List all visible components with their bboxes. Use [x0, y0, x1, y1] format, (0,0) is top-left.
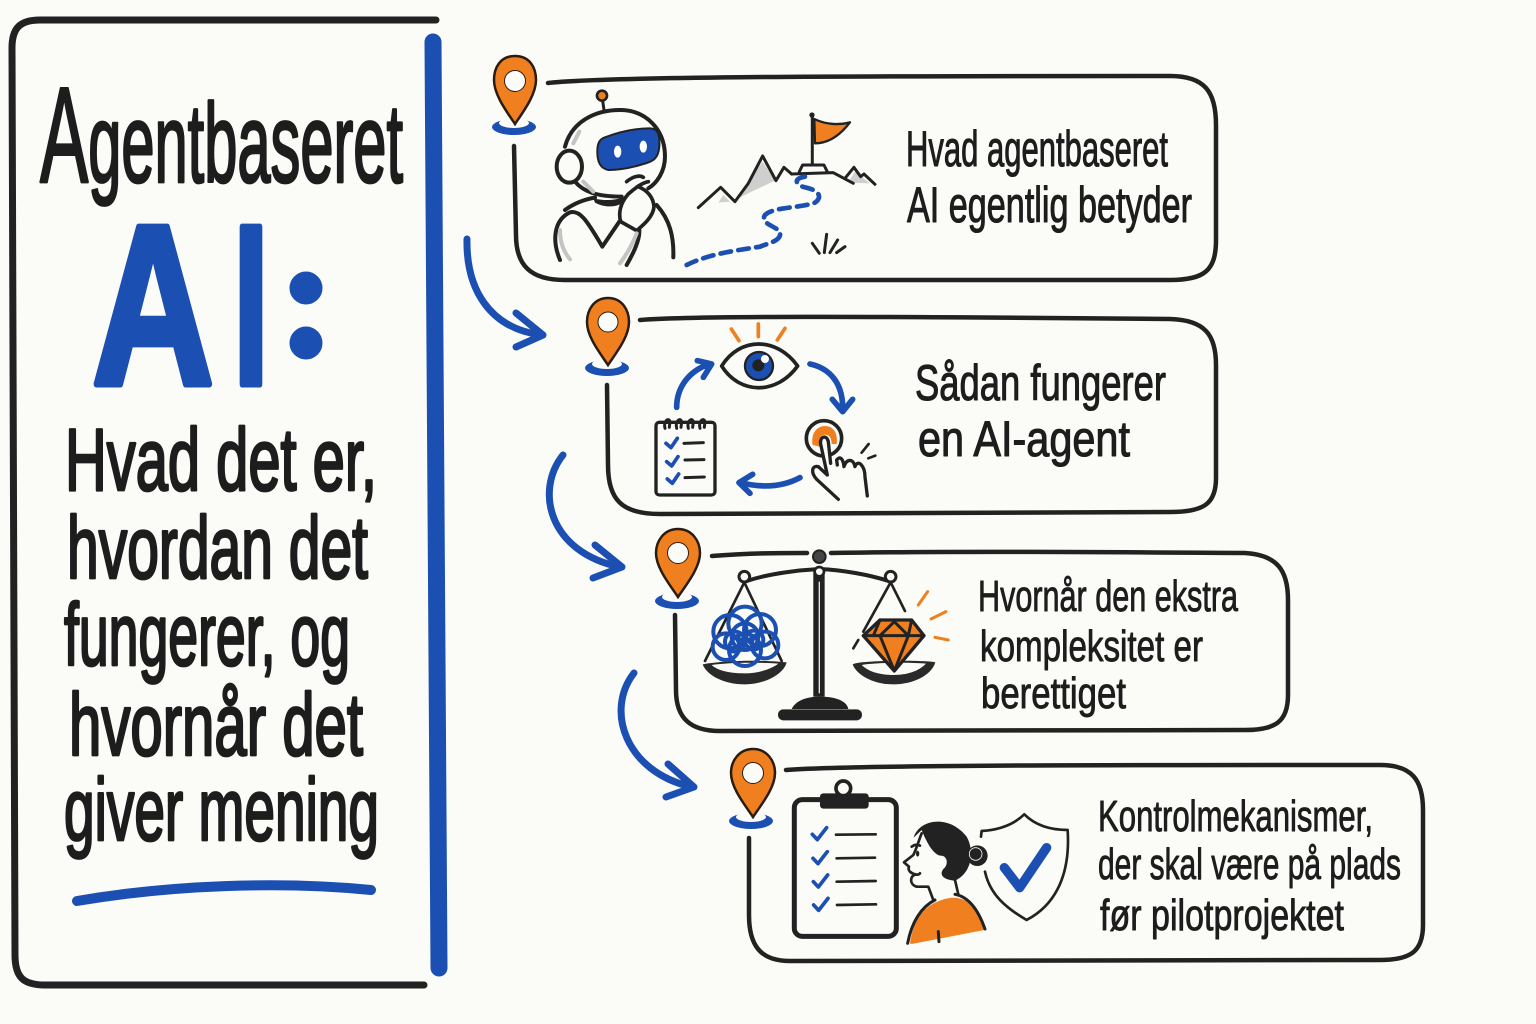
panel: step 3 [655, 529, 1288, 731]
subtitle text: Hvad det er, [65, 410, 377, 509]
icon: agent loop [656, 324, 875, 499]
subtitle text [64, 410, 379, 859]
text: step 4: før pilotprojektet [1100, 891, 1344, 940]
heading: AI: A [92, 179, 214, 433]
pin 1 [492, 56, 536, 135]
panel: step 4 [729, 749, 1423, 961]
text: step 1 [906, 121, 1192, 233]
arrow: step 3 to 4 [621, 673, 694, 797]
heading: Agentbaseret: Agentbaseret [40, 59, 403, 211]
arrow: step 2 to 3 [549, 455, 622, 578]
heading: AI: I [233, 179, 269, 433]
panel: step 1 [492, 56, 1216, 280]
subtitle text: hvordan det [67, 498, 368, 597]
title underline [77, 885, 371, 901]
text: step 4 [1098, 792, 1401, 940]
text: step 3: Hvornår den ekstra [978, 572, 1238, 621]
subtitle text: giver mening [64, 760, 379, 859]
text: step 3 [978, 572, 1238, 718]
text: step 1: AI egentlig betyder [907, 177, 1192, 233]
panel: step 2 [585, 298, 1216, 514]
text: step 2: Sådan fungerer [915, 355, 1166, 411]
panel: title frame [12, 20, 439, 985]
pin 4 [729, 749, 775, 829]
pin 3 [655, 529, 700, 609]
icon: thinking robot [555, 91, 875, 265]
subtitle text: fungerer, og [64, 585, 350, 684]
arrow: step 1 to 2 [467, 239, 543, 347]
text: step 3: berettiget [981, 669, 1126, 718]
subtitle text: hvornår det [69, 675, 363, 774]
text: step 3: kompleksitet er [980, 622, 1203, 671]
pin 2 [585, 298, 629, 376]
text: step 4: Kontrolmekanismer, [1098, 792, 1373, 841]
text: step 1: Hvad agentbaseret [906, 121, 1168, 177]
text: step 2 [915, 355, 1166, 467]
icon: balance scale with knot and diamond [703, 550, 948, 720]
text: step 2: en AI-agent [918, 411, 1130, 467]
icon: clipboard, person and shield [794, 781, 1068, 944]
text: step 4: der skal være på plads [1098, 840, 1401, 889]
